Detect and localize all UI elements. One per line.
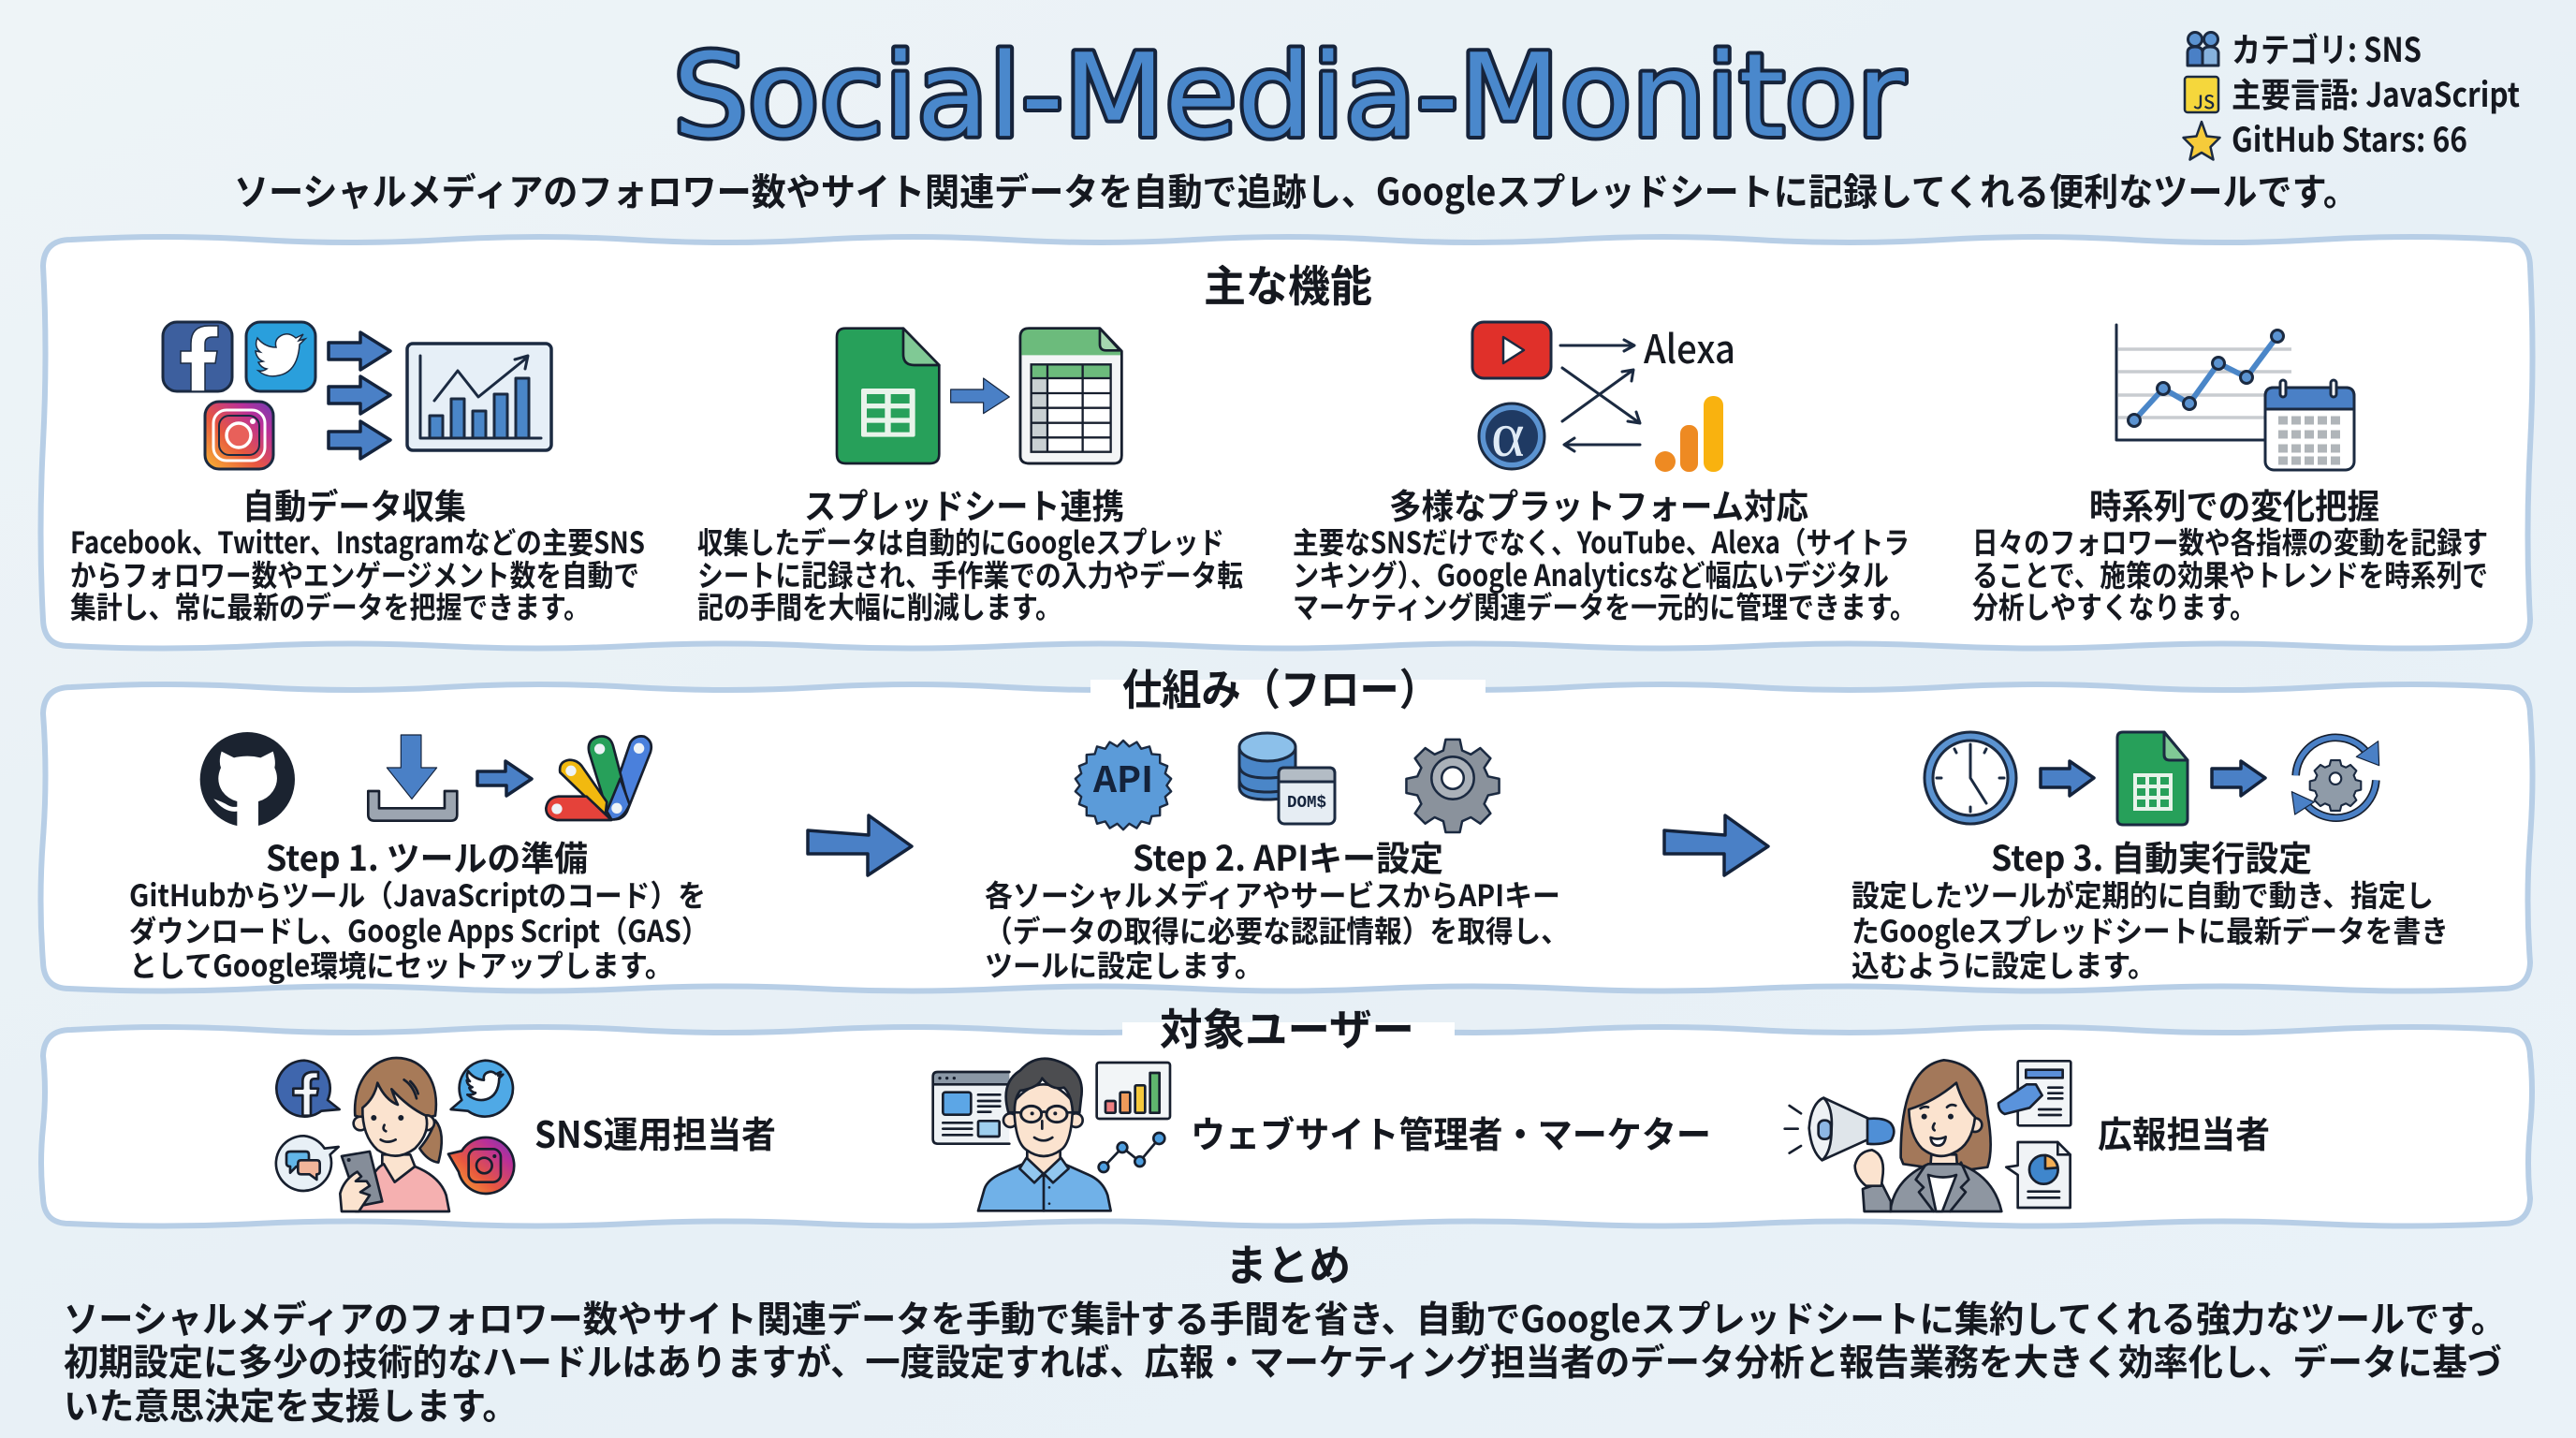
panel background xyxy=(41,684,2533,990)
icon: JavaScript badge xyxy=(2185,77,2218,114)
step description: GitHubからツール（JavaScriptのコード）を xyxy=(129,873,706,916)
arrow: step 2 to step 3 xyxy=(1664,815,1768,875)
icon: automation refresh gear xyxy=(2291,738,2379,818)
step description: 込むように設定します。 xyxy=(1852,943,2156,986)
step title: Step 2. APIキー設定 xyxy=(1133,830,1443,881)
feature title: 自動データ収集 xyxy=(242,478,466,529)
panel: how it works xyxy=(41,656,2533,990)
feature description: 主要なSNSだけでなく、YouTube、Alexa（サイトラ xyxy=(1293,520,1910,563)
icon: code window xyxy=(1279,768,1335,824)
summary text: ソーシャルメディアのフォロワー数やサイト関連データを手動で集計する手間を省き、自動でGoogleスプレッドシートに集約してくれる強力なツールです。 xyxy=(64,1291,2506,1343)
panel background xyxy=(41,1027,2532,1226)
icon: platforms network: α xyxy=(1491,399,1525,470)
feature description: 記の手間を大幅に削減します。 xyxy=(697,584,1061,627)
step description: ツールに設定します。 xyxy=(985,943,1263,986)
feature description xyxy=(697,520,1243,627)
feature title: スプレッドシート連携 xyxy=(804,478,1124,529)
step description: 設定したツールが定期的に自動で動き、指定し xyxy=(1852,873,2434,916)
user label: SNS運用担当者 xyxy=(534,1107,776,1159)
step description: たGoogleスプレッドシートに最新データを書き xyxy=(1852,908,2449,951)
summary text: 初期設定に多少の技術的なハードルはありますが、一度設定すれば、広報・マーケティング担当者のデータ分析と報告業務を大きく効率化し、データに基づ xyxy=(64,1334,2502,1387)
summary text: いた意思決定を支援します。 xyxy=(64,1378,518,1431)
step description: ダウンロードし、Google Apps Script（GAS） xyxy=(129,908,709,951)
step description xyxy=(985,873,1569,986)
feature description: 日々のフォロワー数や各指標の変動を記録す xyxy=(1972,520,2488,563)
icon: download xyxy=(368,735,457,821)
icon: people category xyxy=(2188,32,2218,66)
subtitle: ソーシャルメディアのフォロワー数やサイト関連データを自動で追跡し、Googleスプレッドシートに記録してくれる便利なツールです。 xyxy=(234,162,2358,216)
stars label: GitHub Stars: 66 xyxy=(2232,113,2467,162)
icon: sheet xyxy=(2117,732,2188,825)
panel: main features xyxy=(41,237,2533,648)
illustration: woman with megaphone and documents xyxy=(1785,1060,2071,1211)
feature description: 収集したデータは自動的にGoogleスプレッド xyxy=(697,520,1224,563)
arrow: step 1 to step 2 xyxy=(808,815,912,875)
summary text xyxy=(64,1291,2506,1431)
icon: trend chart with calendar xyxy=(2116,325,2354,470)
panel background xyxy=(41,237,2533,648)
user label: 広報担当者 xyxy=(2098,1107,2270,1159)
illustration: woman with phone and social icons xyxy=(276,1058,514,1211)
icon: code window: DOM$ xyxy=(1287,794,1326,813)
step 2 xyxy=(985,733,1569,986)
user: website manager and marketer xyxy=(933,1059,1711,1211)
feature description: 分析しやすくなります。 xyxy=(1972,584,2256,627)
feature: time series tracking xyxy=(1972,325,2488,627)
icon: gear xyxy=(1406,740,1500,832)
feature title: 時系列での変化把握 xyxy=(2089,478,2379,529)
step 3 xyxy=(1852,732,2449,986)
arrow xyxy=(2212,761,2265,796)
step description: としてGoogle環境にセットアップします。 xyxy=(129,943,673,986)
icon: API badge xyxy=(1076,741,1171,829)
icon: sheet to table xyxy=(837,329,1121,463)
step description xyxy=(129,873,709,986)
icon: clock xyxy=(1925,732,2016,824)
feature: auto data collection xyxy=(70,322,645,627)
user: PR manager xyxy=(1785,1060,2270,1211)
feature description: マーケティング関連データを一元的に管理できます。 xyxy=(1293,584,1916,627)
category label: カテゴリ: SNS xyxy=(2232,23,2422,72)
step description: 各ソーシャルメディアやサービスからAPIキー xyxy=(985,873,1560,916)
icon: social networks to chart xyxy=(163,322,551,469)
feature description: ンキング）、Google Analyticsなど幅広いデジタル xyxy=(1293,552,1889,595)
arrow xyxy=(2041,761,2094,796)
heading background band xyxy=(1122,1022,1455,1039)
language label: 主要言語: JavaScript xyxy=(2232,68,2520,117)
step description: （データの取得に必要な認証情報）を取得し、 xyxy=(985,908,1569,951)
heading: 対象ユーザー xyxy=(1160,996,1414,1058)
feature description xyxy=(70,520,645,627)
illustration: man with dashboards xyxy=(933,1059,1170,1211)
feature title: 多様なプラットフォーム対応 xyxy=(1389,478,1808,529)
heading: まとめ xyxy=(1225,1232,1351,1294)
icon: Google Apps Script xyxy=(546,736,651,820)
icon: database xyxy=(1239,733,1295,800)
step description xyxy=(1852,873,2449,986)
icon: JavaScript badge: JS xyxy=(2193,87,2215,114)
feature description xyxy=(1972,520,2488,627)
feature: multi-platform support xyxy=(1293,318,1916,627)
icon: GitHub xyxy=(200,732,295,829)
step title: Step 1. ツールの準備 xyxy=(266,830,588,881)
title: Social-Media-Monitor xyxy=(673,30,1905,164)
panel: target users xyxy=(41,996,2532,1226)
user label: ウェブサイト管理者・マーケター xyxy=(1191,1107,1711,1159)
repository metadata xyxy=(2183,23,2520,162)
feature description: 集計し、常に最新のデータを把握できます。 xyxy=(70,584,590,627)
feature description xyxy=(1293,520,1916,627)
step title: Step 3. 自動実行設定 xyxy=(1991,830,2312,881)
feature description: シートに記録され、手作業での入力やデータ転 xyxy=(697,552,1243,595)
icon: platforms network: Alexa xyxy=(1644,318,1735,375)
feature: spreadsheet integration xyxy=(697,329,1243,627)
feature description: Facebook、Twitter、Instagramなどの主要SNS xyxy=(70,520,645,563)
user: SNS manager xyxy=(276,1058,776,1211)
section: summary xyxy=(64,1232,2506,1431)
feature description: からフォロワー数やエンゲージメント数を自動で xyxy=(70,552,639,595)
feature description: ることで、施策の効果やトレンドを時系列で xyxy=(1972,552,2488,595)
heading: 仕組み（フロー） xyxy=(1122,656,1439,718)
heading background band xyxy=(1090,680,1486,697)
step 1 xyxy=(129,732,709,986)
heading: 主な機能 xyxy=(1204,253,1372,315)
arrow xyxy=(477,761,532,796)
icon: API badge: API xyxy=(1092,751,1153,802)
icon: star xyxy=(2183,122,2220,159)
icon: platforms network xyxy=(1472,318,1735,472)
